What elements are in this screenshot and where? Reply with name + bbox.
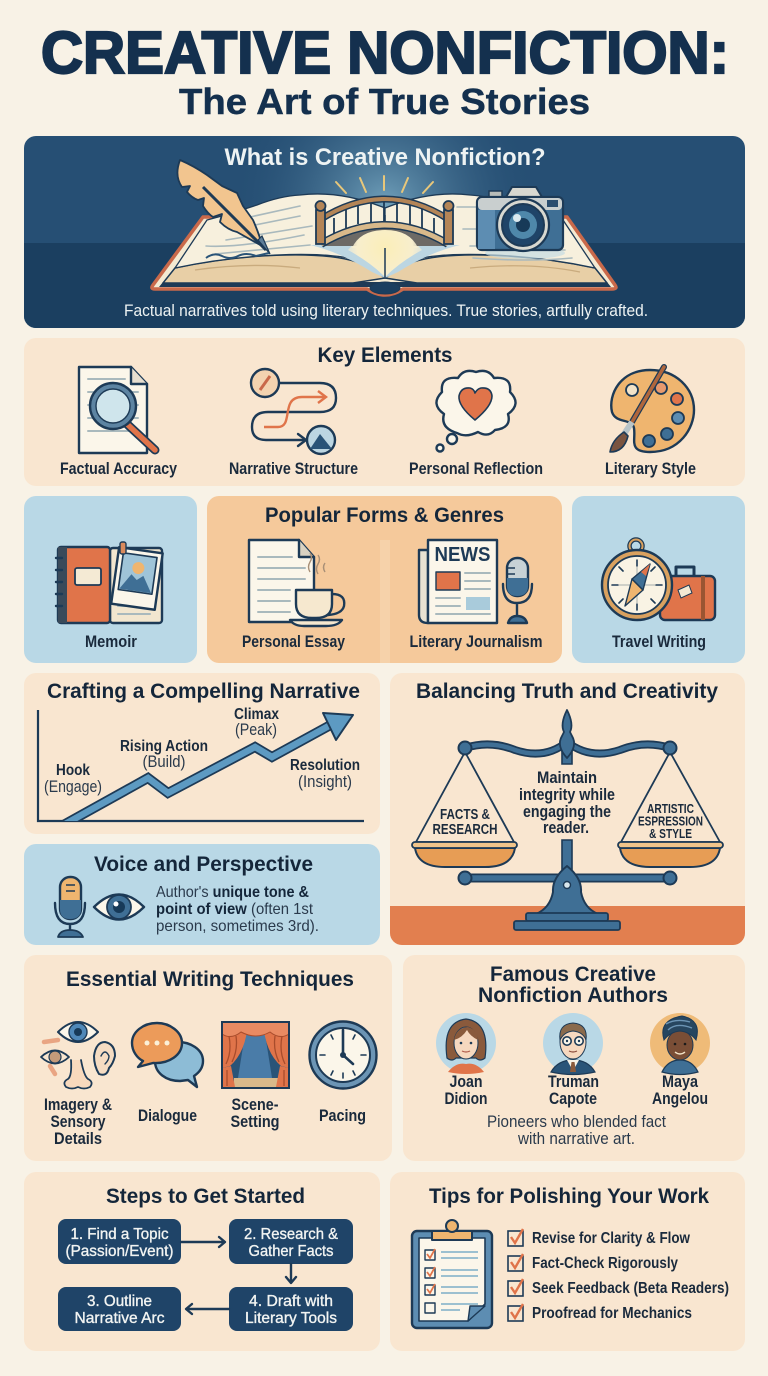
icon: document with magnifier bbox=[79, 367, 155, 453]
panel: famous authors bbox=[403, 955, 745, 1161]
icon: eye bbox=[94, 894, 144, 920]
panel: essential writing techniques bbox=[24, 955, 392, 1161]
authors caption: with narrative art. bbox=[517, 1130, 635, 1148]
icon: microphone bbox=[55, 877, 85, 937]
name: Maya Angelou bbox=[652, 1073, 708, 1108]
label: imagery and sensory details: Details bbox=[54, 1130, 102, 1148]
step 2: Gather Facts bbox=[248, 1243, 334, 1260]
heading: voice: Voice and Perspective bbox=[94, 853, 313, 876]
voice description: point of view (often 1st bbox=[156, 901, 314, 918]
icon: senses bbox=[41, 1022, 115, 1088]
label: climax: Climax bbox=[234, 706, 279, 723]
voice description: person, sometimes 3rd). bbox=[156, 918, 319, 935]
label: climax: (Peak) bbox=[235, 721, 277, 739]
icon: memoir book and photo bbox=[56, 542, 163, 623]
label: imagery and sensory details: Imagery & bbox=[44, 1096, 112, 1114]
icon: clipboard bbox=[412, 1220, 492, 1328]
icon: camera bbox=[477, 187, 565, 259]
icon: newspaper and microphone: NEWS bbox=[434, 544, 490, 566]
hero caption: Factual narratives told using literary techniques. True stories, artfully crafted. bbox=[124, 301, 648, 320]
label: resolution bbox=[290, 757, 360, 791]
name: Joan Didion: Didion bbox=[444, 1090, 488, 1108]
step 4: 4. Draft with bbox=[249, 1293, 333, 1310]
name: Truman Capote: Truman bbox=[548, 1073, 599, 1091]
label: resolution: Resolution bbox=[290, 757, 360, 774]
label: travel writing: Travel Writing bbox=[612, 633, 706, 651]
tip 1: Revise for Clarity & Flow bbox=[532, 1230, 691, 1247]
step 4 bbox=[229, 1287, 353, 1331]
icon: quill bbox=[177, 160, 270, 258]
heading: essential: Essential Writing Techniques bbox=[66, 968, 354, 991]
authors caption: Pioneers who blended fact bbox=[487, 1113, 666, 1131]
step 3: Narrative Arc bbox=[74, 1310, 164, 1327]
scale label: artistic expression bbox=[638, 801, 703, 841]
name: Maya Angelou: Maya bbox=[662, 1073, 699, 1091]
step 3 bbox=[58, 1287, 181, 1331]
heading: popular forms: Popular Forms & Genres bbox=[265, 504, 504, 527]
heading: famous authors: Nonfiction Authors bbox=[478, 984, 668, 1007]
title: CREATIVE NONFICTION: bbox=[41, 20, 729, 86]
scale label: facts and research bbox=[432, 807, 498, 838]
scale label: facts and research: RESEARCH bbox=[432, 822, 498, 838]
name: Truman Capote bbox=[548, 1073, 599, 1108]
label: literary style: Literary Style bbox=[605, 460, 696, 478]
arrow: step 1 to 2 bbox=[181, 1237, 225, 1247]
step 2: 2. Research & bbox=[244, 1226, 338, 1243]
scale text: maintain integrity: Maintain bbox=[537, 769, 597, 787]
icon: newspaper and microphone bbox=[419, 540, 532, 623]
icon: narrative structure path bbox=[251, 369, 336, 454]
label: scene-setting: Scene- bbox=[232, 1096, 278, 1114]
icon: balance scale bbox=[412, 710, 723, 930]
label: factual accuracy: Factual Accuracy bbox=[60, 460, 178, 478]
label: hook bbox=[44, 762, 102, 796]
icon: thought bubble with heart bbox=[436, 371, 516, 452]
hero heading: What is Creative Nonfiction? bbox=[224, 144, 546, 171]
icon: open book bbox=[152, 194, 616, 295]
scale label: facts and research: FACTS & bbox=[440, 807, 490, 823]
label: pacing: Pacing bbox=[319, 1107, 366, 1125]
voice description bbox=[156, 884, 319, 935]
step 3: 3. Outline bbox=[87, 1293, 152, 1310]
panel: steps to get started bbox=[24, 1172, 380, 1351]
scale label: artistic expression: ARTISTIC bbox=[647, 801, 694, 816]
heading: steps: Steps to Get Started bbox=[106, 1185, 305, 1208]
title bbox=[41, 20, 729, 122]
heading: tips: Tips for Polishing Your Work bbox=[429, 1185, 709, 1208]
name: Joan Didion: Joan bbox=[450, 1073, 482, 1091]
arrow: step 4 to 3 bbox=[186, 1304, 229, 1314]
panel: travel writing bbox=[572, 496, 745, 663]
heading: famous authors: Famous Creative bbox=[490, 963, 656, 986]
label: personal reflection: Personal Reflection bbox=[409, 460, 543, 478]
label: imagery and sensory details: Sensory bbox=[50, 1113, 106, 1131]
authors caption bbox=[487, 1113, 666, 1148]
title: The Art of True Stories bbox=[179, 81, 590, 122]
name: Joan Didion bbox=[444, 1073, 488, 1108]
arrow: step 2 to 4 bbox=[286, 1264, 296, 1283]
icon: bridge bbox=[316, 198, 454, 248]
step 1: 1. Find a Topic bbox=[70, 1226, 168, 1243]
tip 4: Proofread for Mechanics bbox=[532, 1305, 692, 1322]
portrait: Joan Didion bbox=[436, 1013, 496, 1074]
label: scene-setting bbox=[230, 1096, 280, 1131]
panel: what is creative nonfiction bbox=[24, 136, 745, 328]
label: dialogue: Dialogue bbox=[138, 1107, 197, 1125]
label: literary journalism: Literary Journalism bbox=[410, 633, 542, 651]
heading: key elements: Key Elements bbox=[318, 344, 452, 367]
chart: narrative arc bbox=[38, 710, 364, 828]
label: climax bbox=[234, 706, 279, 739]
label: scene-setting: Setting bbox=[230, 1113, 280, 1131]
label: imagery and sensory details bbox=[44, 1096, 112, 1148]
label: narrative structure: Narrative Structure bbox=[229, 460, 358, 478]
icon: personal essay and coffee bbox=[249, 540, 344, 626]
step 2 bbox=[229, 1219, 353, 1264]
step 1 bbox=[58, 1219, 181, 1264]
panel: voice and perspective bbox=[24, 844, 380, 945]
panel: balancing truth and creativity bbox=[390, 673, 745, 945]
label: rising action bbox=[120, 738, 208, 771]
icon: clock bbox=[310, 1022, 376, 1088]
tip 3: Seek Feedback (Beta Readers) bbox=[532, 1280, 729, 1297]
step 1: (Passion/Event) bbox=[66, 1243, 174, 1260]
label: hook: (Engage) bbox=[44, 778, 102, 796]
label: memoir: Memoir bbox=[85, 633, 138, 651]
scale label: artistic expression: & STYLE bbox=[649, 826, 692, 841]
scale label: artistic expression: ESPRESSION bbox=[638, 814, 703, 828]
label: hook: Hook bbox=[56, 762, 90, 779]
heading: balancing: Balancing Truth and Creativity bbox=[416, 680, 718, 703]
icon: sun rays bbox=[336, 176, 433, 193]
icon: palette and brush bbox=[610, 367, 694, 452]
icon: suitcase bbox=[660, 567, 715, 620]
heading: crafting: Crafting a Compelling Narrative bbox=[47, 680, 360, 703]
scale text: maintain integrity: engaging the bbox=[523, 803, 611, 821]
scale text: maintain integrity: integrity while bbox=[519, 786, 615, 804]
panel: tips for polishing bbox=[390, 1172, 745, 1351]
label: rising action: (Build) bbox=[142, 753, 186, 771]
label: personal essay: Personal Essay bbox=[242, 633, 346, 651]
tip 2: Fact-Check Rigorously bbox=[532, 1255, 678, 1272]
name: Truman Capote: Capote bbox=[549, 1090, 597, 1108]
label: rising action: Rising Action bbox=[120, 738, 208, 755]
icon: speech bubbles bbox=[132, 1023, 203, 1087]
panel: crafting a compelling narrative bbox=[24, 673, 380, 834]
portrait: Truman Capote bbox=[543, 1013, 603, 1074]
heading: famous authors bbox=[478, 963, 668, 1007]
name: Maya Angelou: Angelou bbox=[652, 1090, 708, 1108]
panel: popular forms and genres bbox=[207, 496, 562, 663]
icon: compass bbox=[602, 540, 672, 620]
scale text: maintain integrity: reader. bbox=[543, 819, 589, 837]
panel: memoir bbox=[24, 496, 197, 663]
scale text: maintain integrity bbox=[519, 769, 615, 837]
icon: stage curtain bbox=[222, 1022, 289, 1088]
portrait: Maya Angelou bbox=[650, 1013, 710, 1074]
panel: key elements bbox=[24, 338, 745, 486]
voice description: Author's unique tone & bbox=[156, 884, 309, 901]
step 4: Literary Tools bbox=[245, 1310, 337, 1327]
label: resolution: (Insight) bbox=[298, 773, 352, 791]
